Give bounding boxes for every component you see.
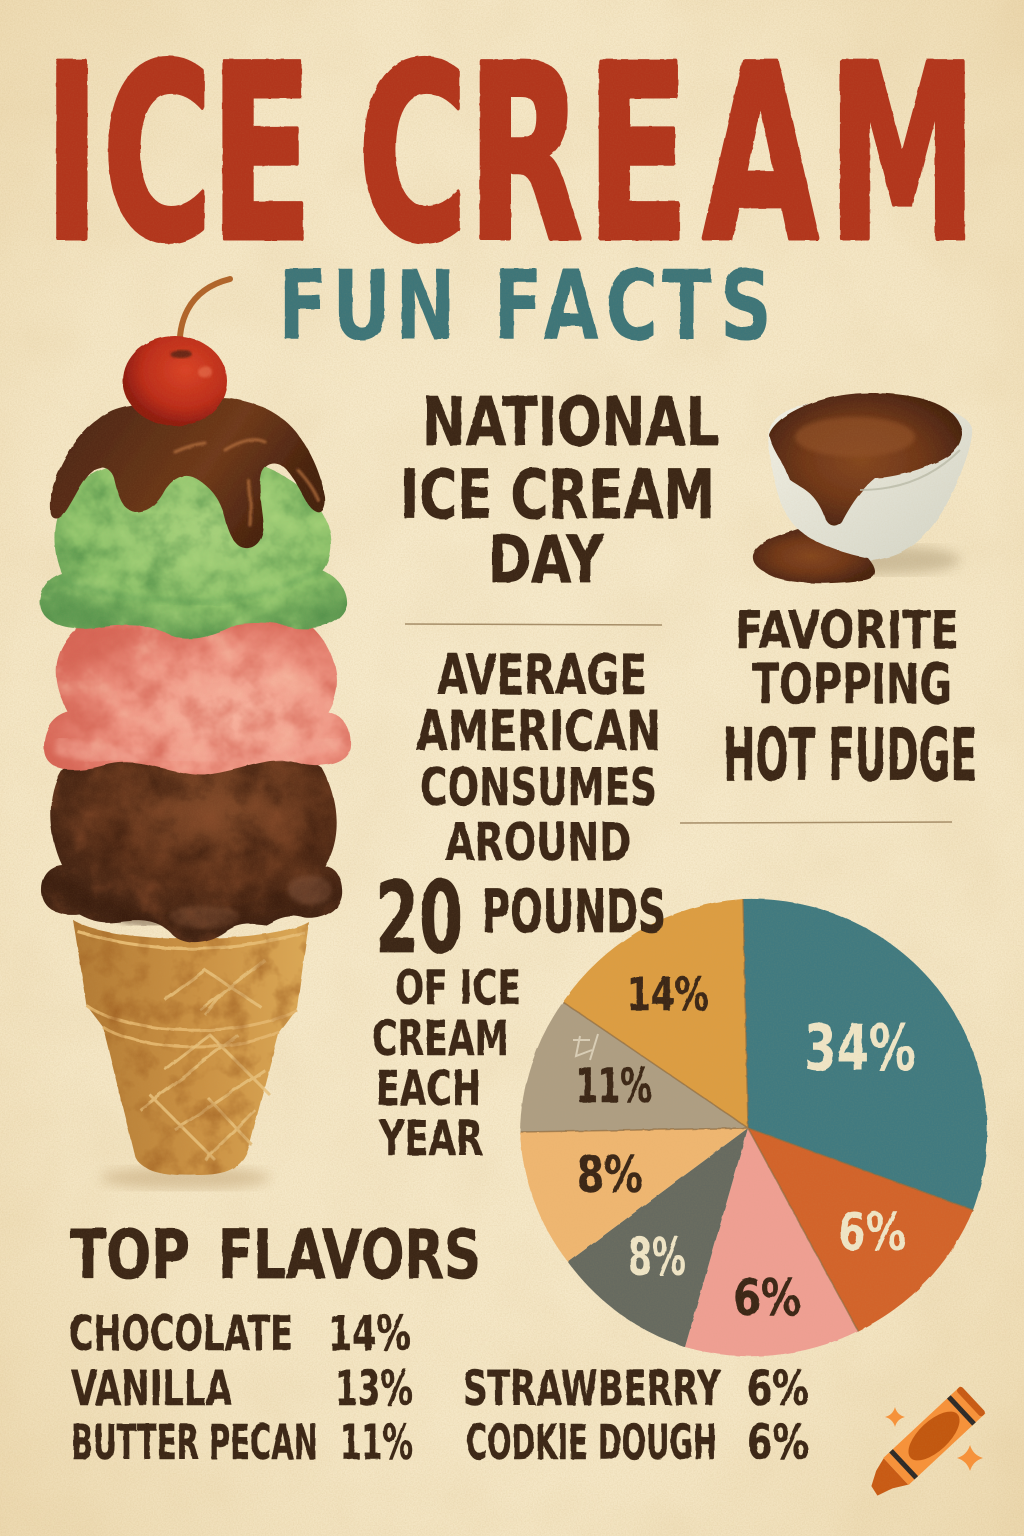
text: average american consumption: CREAM (372, 1011, 509, 1067)
list: top flavors: VANILLA (71, 1361, 232, 1417)
slice labels: 8% (577, 1146, 643, 1204)
slice labels: 6% (733, 1269, 801, 1327)
icon: hot fudge bowl (753, 393, 972, 583)
heading: top flavors (70, 1216, 481, 1295)
chocolate scoop (41, 751, 342, 942)
waffle cone (73, 920, 309, 1175)
text: average american consumption: 20 (375, 861, 463, 976)
list: top flavors: CHOCOLATE (69, 1306, 293, 1362)
text: average american consumption: AVERAGE (437, 643, 647, 707)
text: average american consumption: AMERICAN (416, 699, 661, 763)
text: average american consumption: EACH (376, 1061, 481, 1117)
list: top flavors: STRAWBERRY (463, 1361, 722, 1417)
title: ICE CREAM (44, 14, 977, 296)
list: top flavors: 6% (747, 1361, 809, 1417)
list: top flavors: 6% (747, 1415, 809, 1471)
icon: crayon (861, 1386, 986, 1505)
slice labels: 8% (628, 1228, 686, 1288)
text: average american consumption: CONSUMES (420, 758, 657, 818)
list: top flavors: BUTTER PECAN (71, 1415, 318, 1471)
text: average american consumption: POUNDS (482, 877, 666, 947)
bowl shadow (820, 546, 960, 574)
heading: national ice cream day: DAY (488, 523, 605, 598)
heading: national ice cream day: NATIONAL (422, 383, 719, 461)
cherry (123, 336, 227, 426)
spilled fudge (753, 529, 875, 583)
text: average american consumption: YEAR (378, 1111, 483, 1167)
slice labels: 11% (576, 1059, 652, 1114)
text: average american consumption: AROUND (445, 813, 631, 873)
list: top flavors: 13% (335, 1361, 413, 1417)
sparkles (885, 1407, 905, 1427)
pink scoop (44, 615, 351, 775)
bowl (768, 400, 972, 561)
text: average american consumption (372, 643, 666, 1167)
list: top flavors: CODKIE DOUGH (466, 1415, 717, 1471)
text: favorite topping (723, 601, 977, 797)
text: favorite topping: FAVORITE (735, 601, 959, 661)
fudge sheen (795, 417, 915, 457)
pie chart (520, 899, 987, 1356)
cone shadow (100, 1167, 270, 1189)
heading: national ice cream day (400, 383, 719, 598)
fudge in bowl (769, 393, 962, 526)
list: top flavors: 14% (328, 1306, 411, 1362)
green scoop (40, 452, 347, 638)
cherry stem (180, 279, 230, 352)
slice labels (576, 968, 916, 1327)
slice labels: 14% (627, 968, 709, 1021)
text: favorite topping: TOPPING (752, 652, 952, 716)
text: average american consumption: OF ICE (395, 961, 521, 1016)
pie slices (520, 899, 987, 1356)
heading: top flavors: TOP (70, 1216, 190, 1295)
slice labels: 6% (838, 1203, 906, 1263)
stray mark (573, 1034, 598, 1060)
heading: national ice cream day: ICE CREAM (400, 456, 715, 535)
chocolate fudge (50, 397, 325, 548)
list: top flavors: 11% (340, 1415, 413, 1471)
bowl rim crease (860, 450, 960, 490)
slice labels: 34% (804, 1012, 916, 1086)
illustration: ice cream cone (40, 279, 351, 1189)
list: top flavors (69, 1306, 809, 1471)
heading: top flavors: FLAVORS (218, 1216, 481, 1295)
subtitle: FUN FACTS (278, 251, 772, 363)
